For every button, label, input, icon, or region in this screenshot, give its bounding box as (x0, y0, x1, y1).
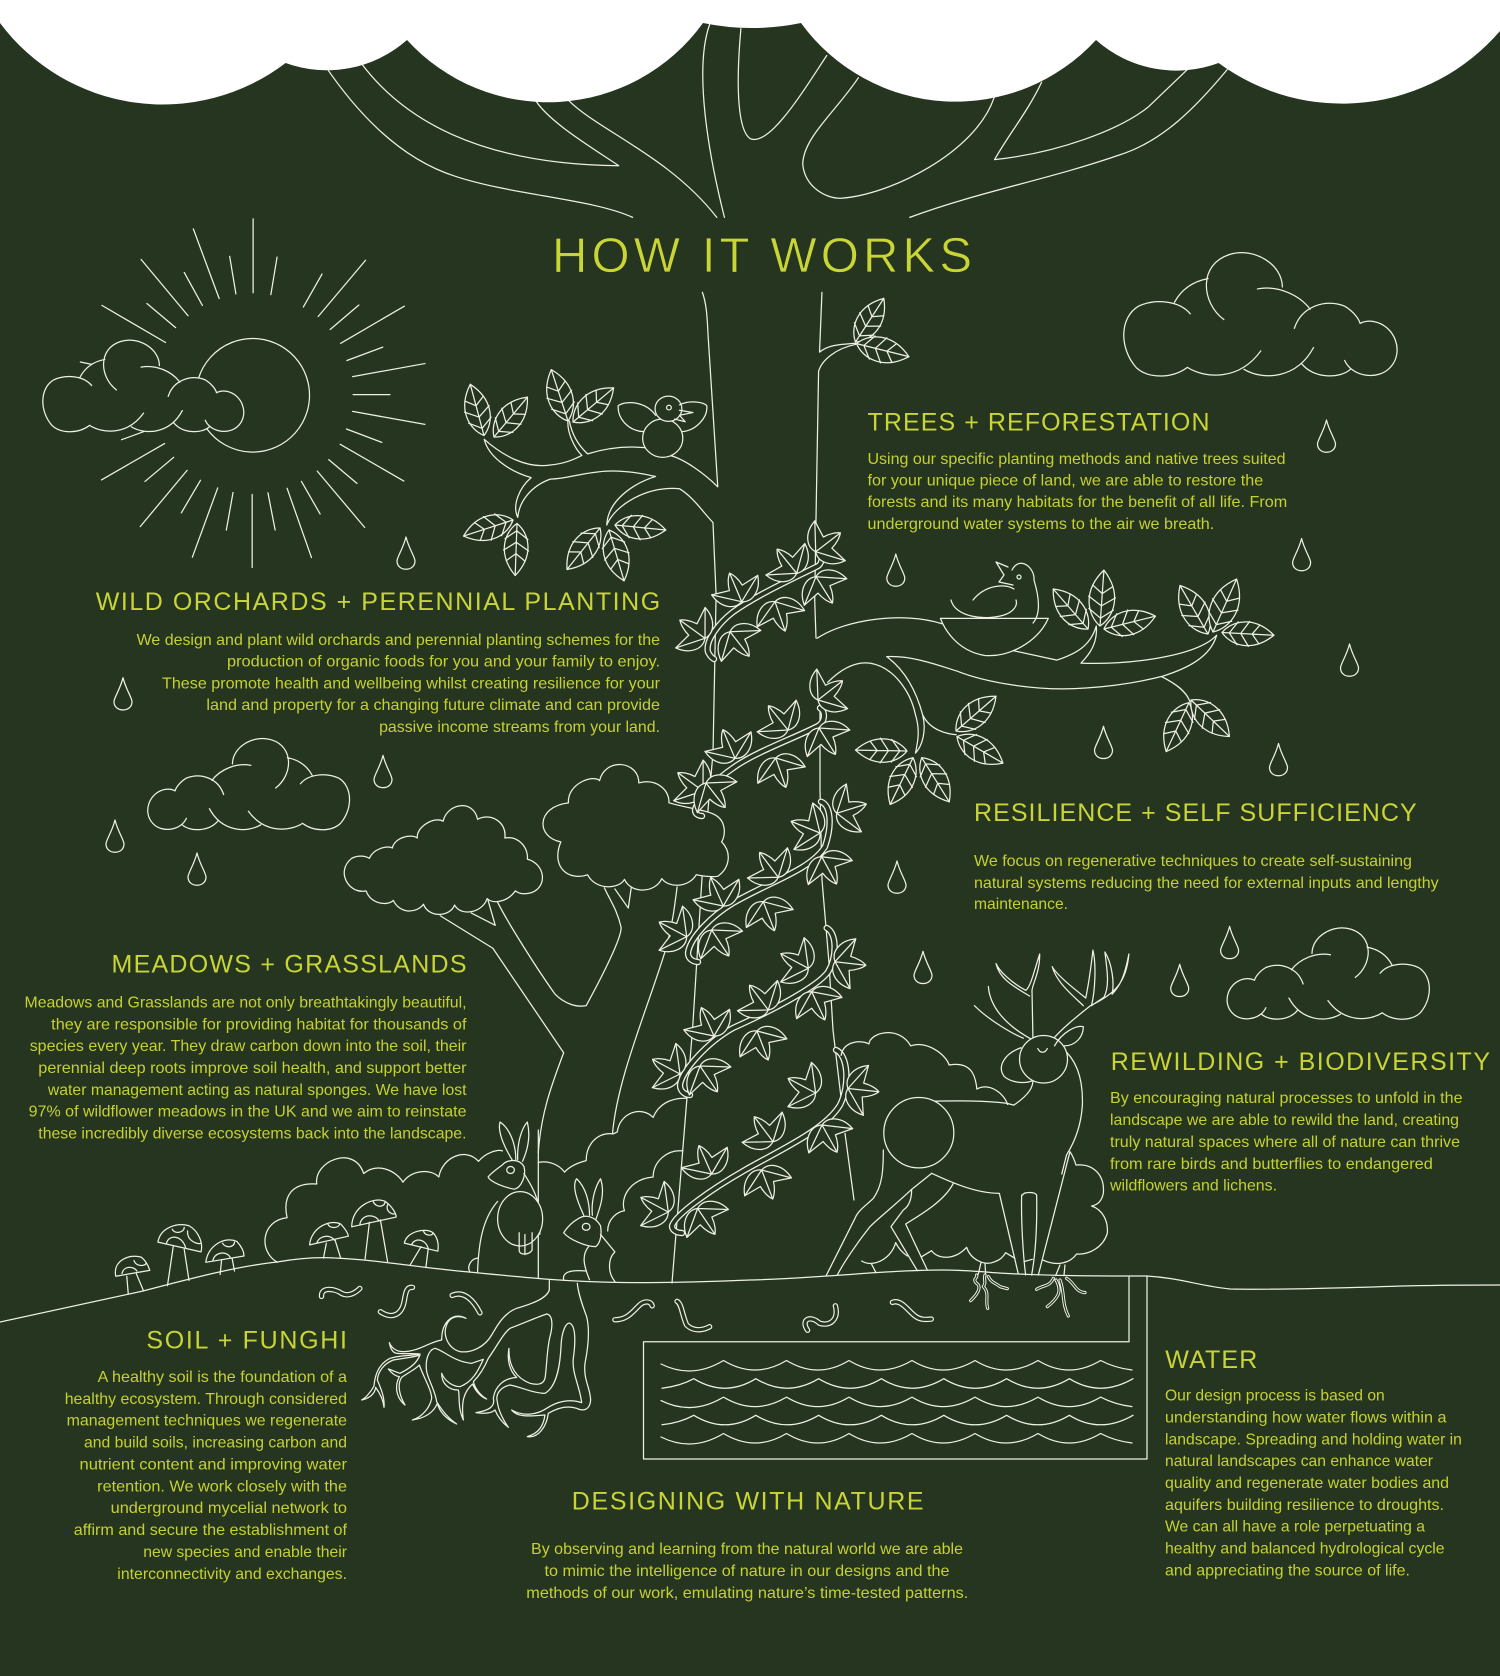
body text (526, 1541, 968, 1602)
body text: natural systems reducing the need for external inputs and lengthy (974, 875, 1439, 892)
bird on branch (618, 396, 707, 457)
body text (65, 1369, 348, 1583)
body text (1109, 1090, 1463, 1194)
body text: quality and regenerate water bodies and (1165, 1475, 1449, 1492)
body text: By encouraging natural processes to unfold in the (1110, 1090, 1463, 1107)
body text: passive income streams from your land. (379, 719, 660, 736)
bird in nest (951, 562, 1038, 623)
body text: We can all have a role perpetuating a (1165, 1518, 1425, 1536)
heading: DESIGNING WITH NATURE (572, 1488, 924, 1516)
heading: WILD ORCHARDS + PERENNIAL PLANTING (96, 588, 660, 616)
body text: methods of our work, emulating nature’s time-tested patterns. (526, 1585, 968, 1602)
body text: understanding how water flows within a (1165, 1410, 1447, 1426)
deer upper body and antlers (841, 950, 1129, 1174)
body text: affirm and secure the establishment of (74, 1522, 348, 1539)
body text: nutrient content and improving water (80, 1456, 348, 1474)
body text: species every year. They draw carbon down into the soil, their (30, 1038, 467, 1055)
body text: underground mycelial network to (111, 1500, 347, 1517)
body text: interconnectivity and exchanges. (117, 1566, 347, 1583)
tree roots (362, 1281, 591, 1437)
sun (80, 219, 425, 568)
body text: aquifers building resilience to droughts. (1165, 1497, 1444, 1514)
body text: land and property for a changing future climate and can provide (206, 697, 660, 714)
worms (322, 1287, 931, 1330)
body text: A healthy soil is the foundation of a (98, 1369, 347, 1386)
body text: landscape we are able to rewild the land, creating (1110, 1112, 1459, 1129)
body text: healthy ecosystem. Through considered (65, 1391, 347, 1408)
foreground tree (344, 764, 728, 1153)
rabbits (469, 1122, 615, 1281)
ground line (0, 1258, 1500, 1322)
tree branches at top (325, 24, 724, 217)
title: HOW IT WORKS (552, 229, 972, 283)
section: designing with nature (526, 1488, 968, 1602)
body text: These promote health and wellbeing whilst creating resilience for your (162, 675, 661, 692)
section: wild orchards (96, 588, 661, 736)
ivy vines (672, 552, 846, 1233)
body text: retention. We work closely with the (97, 1478, 347, 1495)
body text: perennial deep roots improve soil health, and support better (38, 1060, 467, 1077)
body text (868, 451, 1287, 533)
underground water tank (644, 1276, 1147, 1459)
section: meadows and grasslands (24, 950, 467, 1142)
top cloud (0, 0, 1500, 104)
body text: By observing and learning from the natural world we are able (531, 1541, 963, 1558)
heading: TREES + REFORESTATION (868, 408, 1210, 436)
body text: maintenance. (974, 896, 1068, 913)
deer legs and rear bushes (826, 1133, 1107, 1316)
section: rewilding (1109, 1048, 1490, 1194)
body text (1165, 1388, 1462, 1579)
section: water (1165, 1346, 1462, 1579)
body text: forests and its many habitats for the benefit of all life. From (868, 494, 1287, 511)
body text: and build soils, increasing carbon and (84, 1435, 347, 1452)
body text: water management acting as natural sponges. We have lost (47, 1082, 467, 1099)
body text: We design and plant wild orchards and perennial planting schemes for the (137, 632, 660, 649)
section: trees and reforestation (868, 408, 1287, 533)
body text: to mimic the intelligence of nature in our designs and the (544, 1563, 950, 1580)
tree branches at top right (738, 29, 1227, 217)
body text: 97% of wildflower meadows in the UK and we aim to reinstate (29, 1104, 467, 1121)
body text: new species and enable their (143, 1544, 348, 1561)
bushes (265, 1098, 687, 1278)
section: soil and funghi (65, 1327, 348, 1583)
body text: natural landscapes can enhance water (1165, 1453, 1434, 1470)
body text: underground water systems to the air we breath. (868, 516, 1214, 533)
heading: RESILIENCE + SELF SUFFICIENCY (974, 799, 1417, 827)
body text: these incredibly diverse ecosystems back into the landscape. (38, 1126, 466, 1142)
body text: production of organic foods for you and your family to enjoy. (227, 654, 660, 671)
body text: wildflowers and lichens. (1109, 1178, 1277, 1194)
body text (24, 995, 467, 1142)
cloud right (1227, 928, 1429, 1019)
body text: for your unique piece of land, we are able to restore the (868, 472, 1263, 489)
heading: SOIL + FUNGHI (146, 1327, 347, 1355)
body text (137, 632, 661, 736)
body text: healthy and balanced hydrological cycle (1165, 1540, 1445, 1557)
body text: they are responsible for providing habitat for thousands of (51, 1016, 467, 1033)
water waves (661, 1360, 1133, 1444)
leaves on nest branch (855, 569, 1275, 810)
heading: MEADOWS + GRASSLANDS (112, 950, 466, 978)
body text: Our design process is based on (1165, 1388, 1385, 1404)
body text: and appreciating the source of life. (1165, 1562, 1410, 1579)
bird branch (484, 292, 718, 600)
section: resilience (974, 799, 1439, 913)
rain drops (106, 420, 1358, 997)
nest branch (817, 618, 1217, 753)
body text: landscape. Spreading and holding water in (1165, 1431, 1462, 1448)
cloud beside sun (43, 340, 244, 432)
mushrooms (115, 1200, 438, 1294)
cloud left (148, 738, 350, 830)
body text: We focus on regenerative techniques to create self-sustaining (974, 853, 1412, 870)
leaves on bird branch (458, 292, 912, 584)
body text: Meadows and Grasslands are not only breathtakingly beautiful, (24, 995, 466, 1012)
main trunk (672, 292, 856, 1283)
body text (974, 853, 1439, 913)
body text: from rare birds and butterflies to endangered (1110, 1156, 1433, 1173)
body text: truly natural spaces where all of nature can thrive (1110, 1134, 1460, 1151)
ivy leaves (629, 513, 881, 1248)
cloud top right (1124, 253, 1397, 376)
body text: Using our specific planting methods and native trees suited (868, 451, 1286, 468)
heading: REWILDING + BIODIVERSITY (1111, 1048, 1490, 1076)
heading: WATER (1165, 1346, 1257, 1374)
body text: management techniques we regenerate (67, 1413, 347, 1430)
